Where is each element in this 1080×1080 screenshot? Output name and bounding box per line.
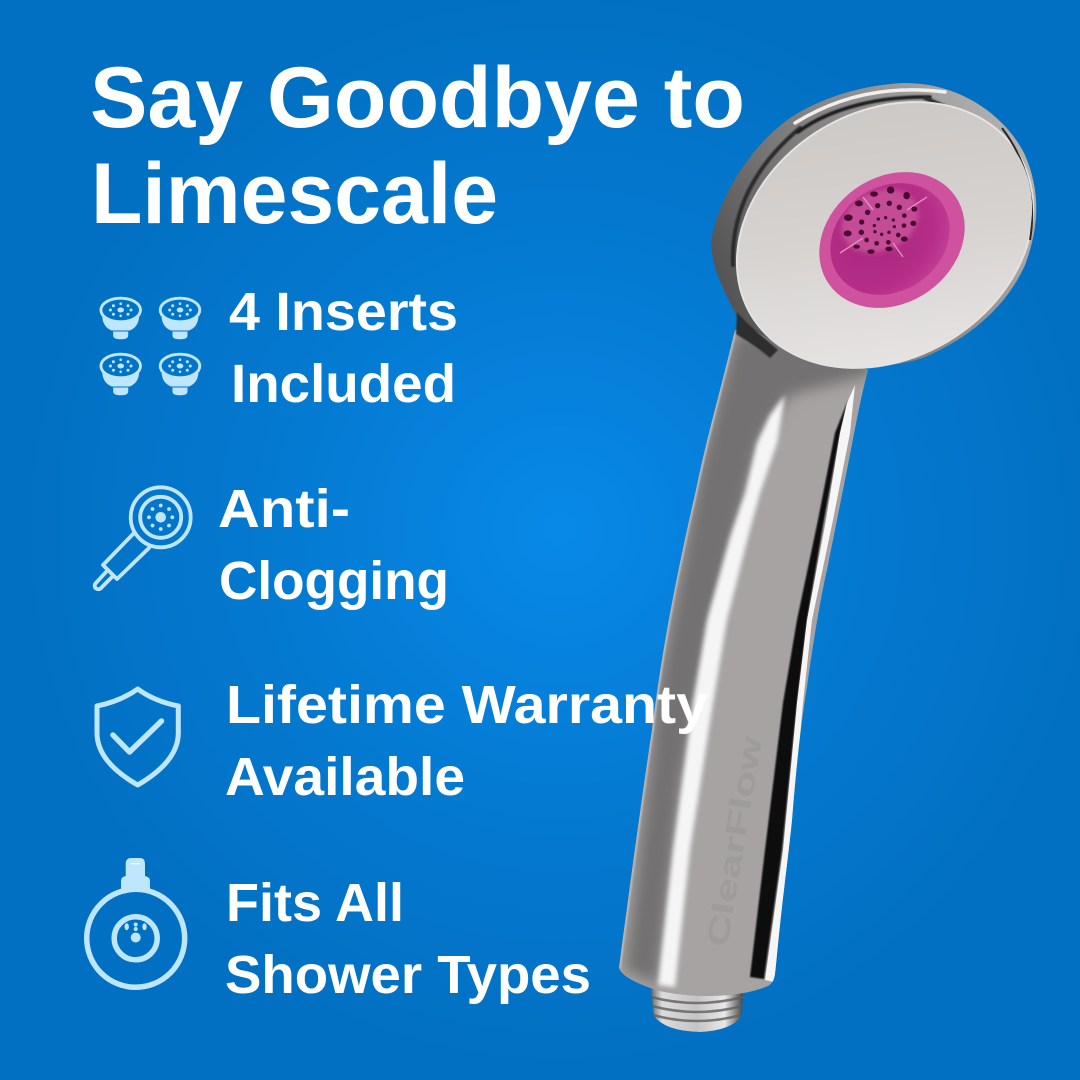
product: chrome shower head (600, 47, 1080, 1032)
pink filter insert (793, 144, 991, 336)
right rim edge line (1002, 128, 1032, 240)
feature text: anti-clogging: Clogging (219, 551, 449, 611)
title: Limescale (91, 146, 498, 242)
rim reflections (733, 90, 958, 265)
feature text: lifetime warranty: Available (225, 747, 465, 807)
white shower face (689, 50, 1080, 420)
title (90, 50, 745, 242)
shower head rim (711, 83, 1036, 366)
icon: shower head (95, 487, 191, 589)
feature text: fits all shower types: Shower Types (225, 945, 591, 1005)
feature text: 4 inserts included (229, 282, 458, 414)
shower thread connector (651, 985, 743, 1032)
feature text: fits all shower types: Fits All (226, 873, 404, 933)
feature text: anti-clogging: Anti- (218, 479, 350, 539)
title: Say Goodbye to (90, 50, 745, 146)
icon: shield with check (97, 689, 178, 785)
embossed logo: ClearFlow (701, 733, 769, 949)
feature text: anti-clogging (218, 479, 449, 611)
shower handle (619, 330, 868, 996)
feature text: 4 inserts included: Included (231, 354, 456, 414)
icon: shower connector (87, 858, 185, 987)
filter holes (844, 186, 917, 254)
highlight stripe (658, 395, 785, 987)
feature text: fits all shower types (225, 873, 591, 1005)
feature text: 4 inserts included: 4 Inserts (229, 282, 458, 342)
feature text: lifetime warranty (225, 675, 708, 807)
white face ring (686, 47, 1080, 423)
feature text: lifetime warranty: Lifetime Warranty (226, 675, 708, 735)
black reflection stripe (750, 400, 848, 979)
right edge white stripe (765, 385, 855, 982)
neck shadow (736, 312, 778, 358)
icon: four filter inserts (101, 298, 200, 395)
